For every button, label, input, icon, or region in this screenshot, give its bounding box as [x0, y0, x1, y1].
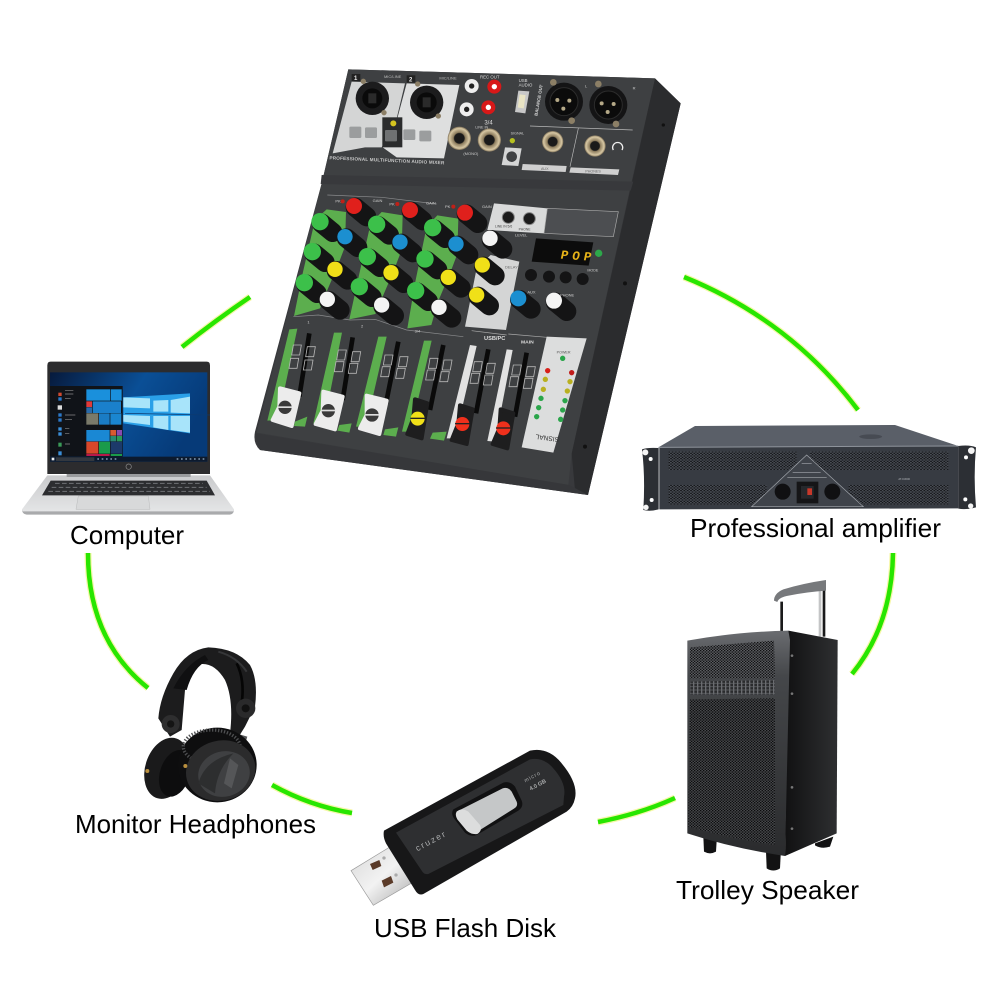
USB printing — [414, 770, 547, 853]
front ear cup — [178, 728, 262, 809]
connector: headphones to computer — [88, 553, 148, 688]
speaker feet — [703, 837, 833, 870]
top input panels: 1 — [354, 76, 358, 82]
headphone and line jack panel — [487, 203, 618, 237]
amplifier front — [658, 434, 958, 509]
USB port and signal — [502, 78, 533, 166]
connector: mixer to amplifier — [684, 277, 858, 410]
label: Monitor Headphones: Monitor Headphones — [75, 809, 316, 839]
fader section: MAIN — [521, 339, 534, 345]
top input panels: MIC/LINE — [384, 74, 402, 79]
knob labels: DELAY — [505, 264, 518, 269]
speaker front — [687, 631, 793, 856]
USB port and signal: AUDIO — [519, 83, 533, 88]
knob labels: 1 — [307, 319, 310, 324]
balanced XLR outputs — [533, 79, 636, 127]
RCA and line connectors: REC OUT — [480, 75, 500, 80]
headphone and line jack panel: PHONE — [519, 228, 531, 232]
laptop computer — [22, 362, 234, 515]
knob labels: LEVEL — [515, 233, 528, 238]
label: Trolley Speaker: Trolley Speaker — [676, 875, 859, 905]
label: Professional amplifier: Professional amplifier — [690, 513, 941, 543]
label: Computer: Computer — [70, 520, 184, 550]
aux and phones jacks: AUX — [541, 167, 549, 171]
level meter LEDs: SISNAL — [535, 432, 560, 443]
trolley speaker — [687, 580, 838, 870]
RCA and line connectors: (MONO) — [463, 151, 479, 156]
USB port and signal: SIGNAL — [511, 132, 524, 136]
aux and phones jacks — [522, 126, 633, 175]
laptop screen — [47, 362, 210, 474]
knob labels: GAIN — [426, 201, 436, 206]
knob labels: PK — [335, 199, 341, 204]
knob labels: GAIN — [373, 198, 383, 203]
balanced XLR outputs: L — [585, 84, 588, 89]
level meter LEDs: POWER — [557, 350, 571, 354]
LED display and buttons — [525, 238, 602, 285]
fader caps — [273, 388, 513, 448]
USB printing: micro — [523, 770, 542, 784]
USB body — [384, 750, 576, 894]
control triangle — [752, 455, 863, 507]
headphone and line jack panel: LINE IN 5/6 — [495, 225, 512, 229]
delay panel — [465, 255, 519, 330]
RCA and line connectors — [448, 75, 501, 156]
laptop deck — [22, 474, 234, 515]
fader section: USB/PC — [484, 336, 505, 342]
speaker side — [785, 631, 838, 856]
knob labels — [307, 198, 575, 334]
fader section — [267, 329, 587, 453]
amplifier top — [658, 425, 958, 447]
USB printing: cruzer — [414, 828, 448, 853]
amplifier front: AT-K3000 — [898, 477, 910, 481]
top input panels: MIC/LINE — [439, 76, 457, 81]
USB port and signal: USB — [519, 78, 528, 83]
back ear cup — [137, 732, 197, 805]
start menu tiles — [50, 386, 207, 462]
RCA and line connectors: 3/4 — [484, 120, 493, 126]
aux and phones jacks: PHONES — [585, 170, 601, 174]
channel outlines — [293, 195, 463, 337]
top input panels — [329, 74, 459, 165]
knob labels: AUX — [527, 289, 536, 294]
connector: speaker to USB disk — [598, 798, 675, 822]
panel caption: PROFESSIONAL MULTIFUNCTION AUDIO MIXER — [329, 155, 445, 165]
connector: mixer to computer — [182, 297, 250, 347]
level meter LEDs — [534, 350, 574, 443]
professional amplifier — [642, 425, 976, 511]
channel green panels — [294, 209, 458, 328]
knob labels: PK — [445, 204, 451, 209]
USB connector — [351, 847, 414, 905]
knob labels: 3/4 — [415, 329, 421, 334]
connector: amplifier to speaker — [852, 553, 893, 674]
headband — [158, 647, 256, 740]
RCA and line connectors: LINE IN — [475, 126, 488, 130]
knob labels: PHONE — [560, 293, 575, 298]
label: USB Flash Disk: USB Flash Disk — [374, 913, 557, 943]
knobs — [296, 198, 567, 318]
USB flash disk — [351, 750, 576, 905]
mixer body — [254, 69, 681, 495]
knob labels: PK — [389, 201, 395, 206]
knob labels: 2 — [361, 324, 364, 329]
top input panels: 2 — [409, 77, 413, 83]
audio mixer — [254, 69, 681, 495]
connector: USB disk to headphones — [272, 785, 352, 813]
hinges — [162, 699, 255, 750]
knob labels: GAIN — [482, 204, 492, 209]
LED display and buttons: POP — [559, 248, 593, 265]
monitor headphones — [137, 647, 262, 809]
balanced XLR outputs: BALANCE OUT — [533, 84, 544, 116]
rack ears — [642, 446, 976, 511]
USB printing: 4.0 GB — [529, 779, 547, 792]
balanced XLR outputs: R — [633, 85, 636, 90]
LED display and buttons: MODE — [587, 268, 599, 272]
trolley handle — [774, 580, 826, 637]
